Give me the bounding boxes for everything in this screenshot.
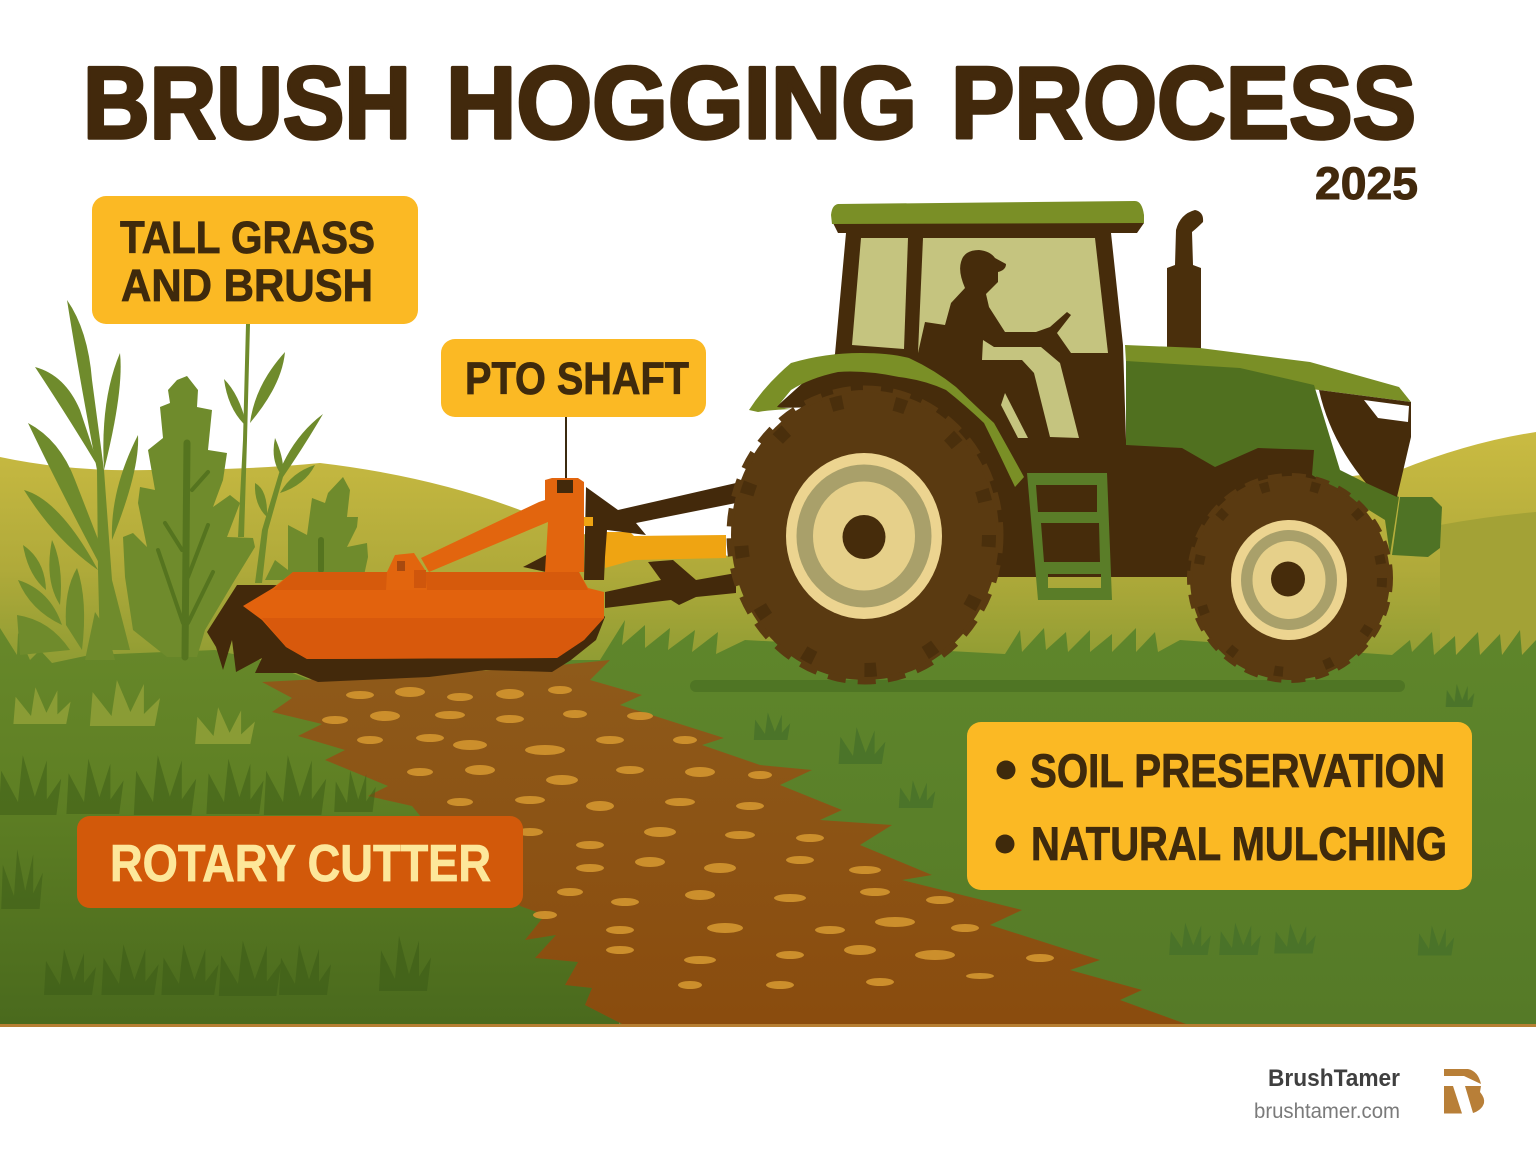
tractor [730,201,1442,681]
tractor ground shadow [690,680,1405,692]
driver silhouette [918,250,1090,440]
year: 2025 [1315,158,1418,209]
cutter frame [421,478,584,572]
cutter skirt [207,585,605,682]
footer brand: brushtamer.com [1254,1100,1400,1123]
central bush [123,376,255,657]
tractor hitch arms [523,483,736,608]
footer brand: BrushTamer [1268,1065,1400,1092]
hood [1125,345,1411,402]
dirt path with mulch [262,660,1186,1024]
roof [831,201,1144,224]
title: BRUSH [83,46,411,160]
rear fender [749,353,1024,487]
title: HOGGING [446,46,917,160]
grass tufts foreground [0,680,1474,996]
cab step ladder [1027,473,1112,600]
gap between driver's legs [982,340,1079,438]
small bush [265,477,368,580]
label: rotary cutter: ROTARY CUTTER [110,835,491,893]
PTO driveshaft [605,532,726,568]
rear wheel [730,389,1000,681]
label: PTO shaft: PTO SHAFT [465,353,689,404]
label: benefits: SOIL PRESERVATION [1030,744,1445,797]
label: PTO shaft [441,339,706,417]
grille [1319,390,1411,497]
front wheel [1190,476,1390,680]
label: rotary cutter [77,816,523,908]
exhaust stack [1167,210,1203,350]
label: benefits: NATURAL MULCHING [1031,817,1447,870]
plants: tall grass and brush [17,300,368,660]
headlight [1364,400,1409,422]
deck hitch [386,553,427,590]
tall stalks [224,324,323,583]
label: tall grass and brush [92,196,418,324]
cutter deck [243,572,604,659]
cab and body [775,223,1320,577]
title: PROCESS [951,46,1416,160]
label: tall grass and brush: AND BRUSH [121,260,373,311]
footer brand [1254,1065,1400,1123]
label: tall grass and brush: TALL GRASS [120,212,375,263]
front bumper [1392,497,1442,557]
footer logo [1444,1069,1484,1114]
title [83,46,1416,160]
callout leader lines [565,417,567,481]
cab windows [852,238,908,349]
label: benefits [967,722,1472,890]
rotary cutter [207,478,736,682]
